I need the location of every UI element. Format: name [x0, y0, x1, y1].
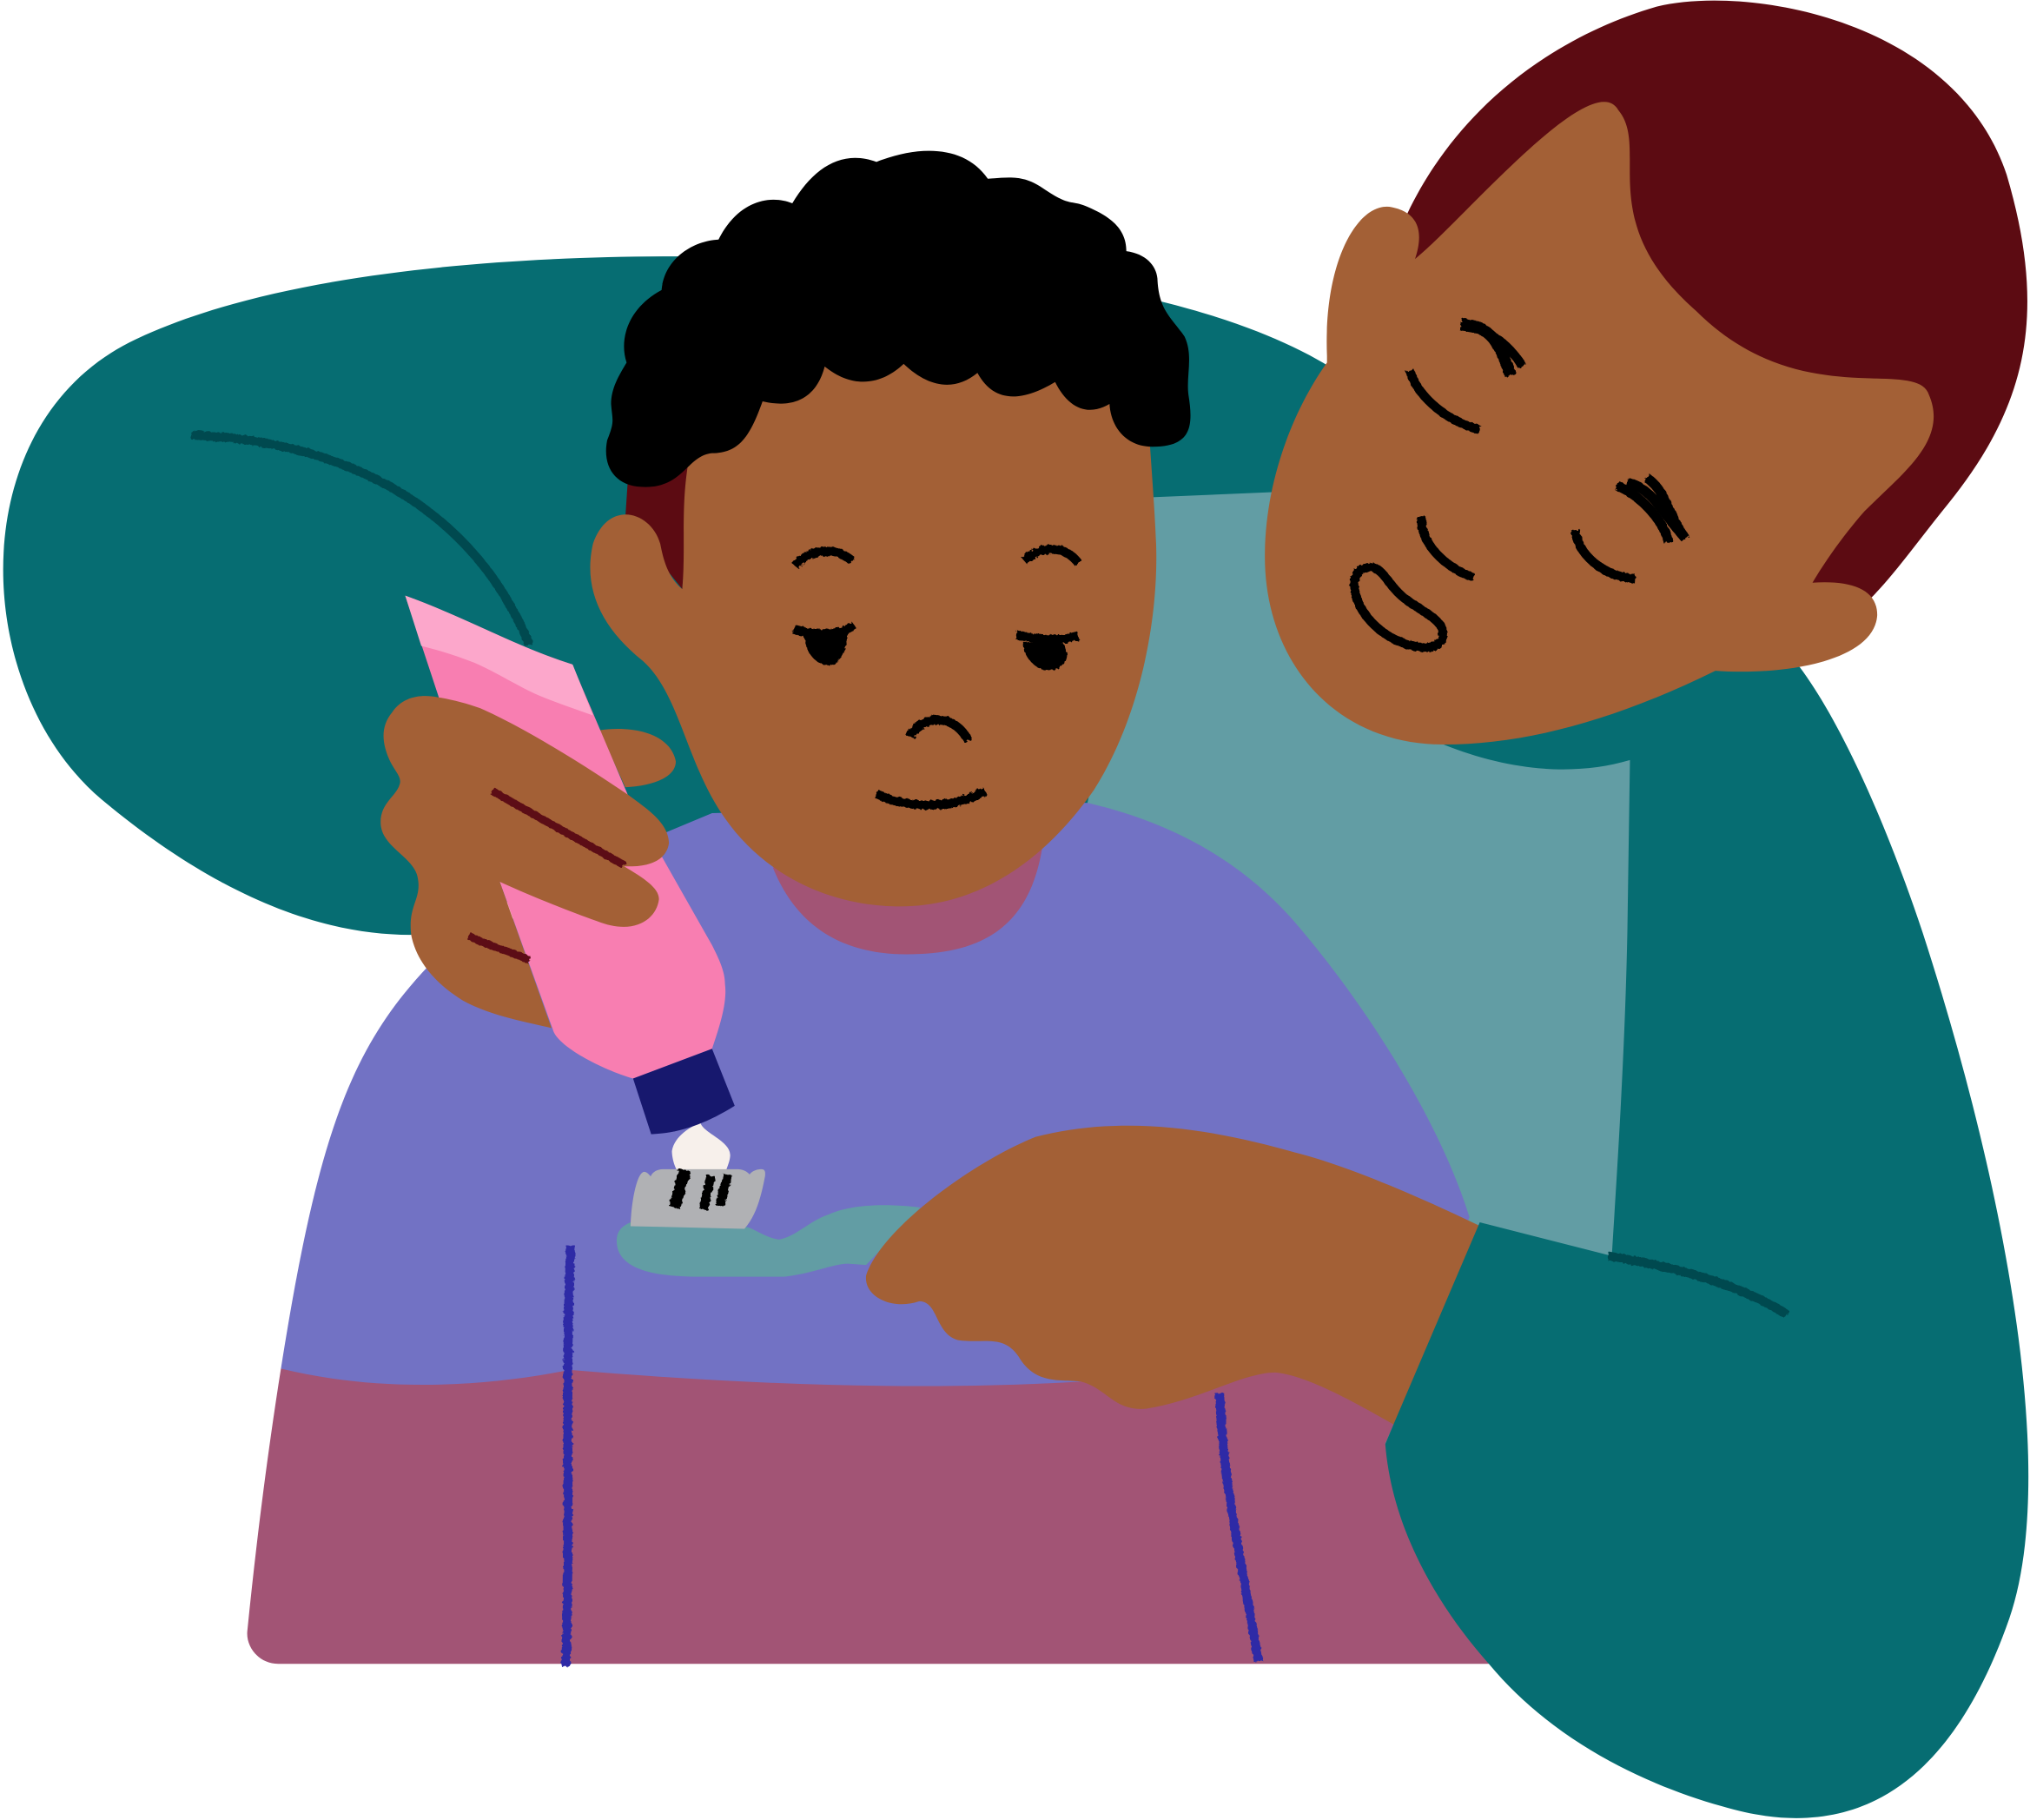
child's trousers	[248, 1294, 1489, 1664]
sleeve line: front arm	[1608, 1256, 1787, 1314]
parent's hand holding toothbrush	[866, 1126, 1515, 1431]
finger line: upper	[492, 791, 624, 865]
child's shirt	[281, 803, 1470, 1489]
toothbrush handle	[617, 1205, 921, 1277]
toothpaste tube	[406, 596, 735, 1135]
parent's hand holding tube	[380, 696, 669, 1028]
child's face features	[794, 549, 1079, 805]
toothbrush bristles	[631, 1169, 765, 1228]
parent's back arm	[3, 256, 1333, 935]
sleeve line: back arm	[192, 435, 530, 645]
tube cap	[633, 1049, 735, 1135]
finger line: lower	[469, 936, 530, 960]
bristle marks	[675, 1170, 728, 1209]
tube crimp	[406, 596, 593, 715]
parent's head	[1265, 102, 1934, 745]
parent's hair	[1396, 1, 2027, 621]
toothpaste	[672, 1122, 731, 1170]
child's hair behind ear	[625, 447, 694, 589]
thumb behind tube	[599, 729, 676, 787]
trouser line: left	[565, 1246, 571, 1666]
parent's face features	[1354, 324, 1686, 647]
child's collar	[773, 848, 1042, 954]
trouser line: right	[1220, 1393, 1259, 1661]
child's head	[590, 349, 1156, 906]
child's hair	[606, 151, 1191, 487]
parent's torso and sleeve	[1385, 660, 2028, 1818]
parent's inner shirt	[1088, 492, 1644, 1294]
